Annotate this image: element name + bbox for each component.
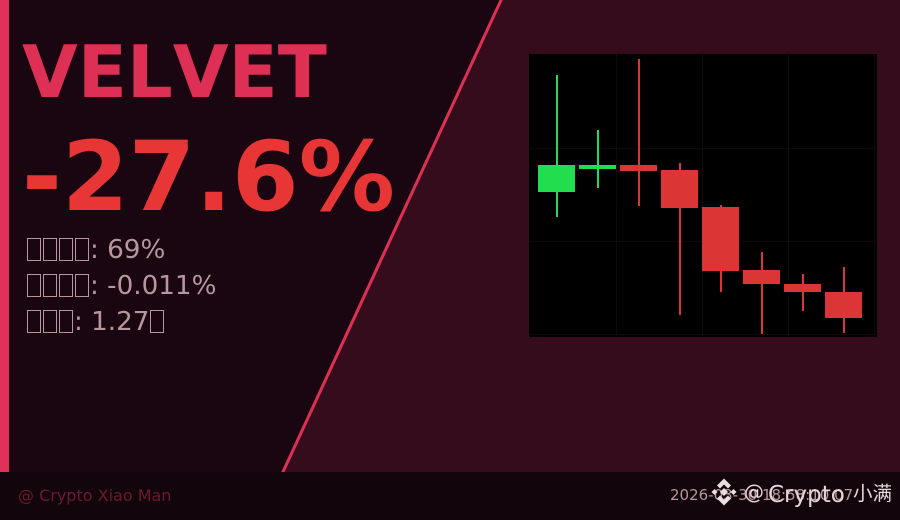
candle 4	[661, 163, 698, 315]
candlestick chart	[529, 54, 877, 337]
candle 6	[743, 252, 780, 334]
footer handle: @ Crypto Xiao Man	[18, 486, 171, 505]
icon: watermark logo	[712, 478, 736, 506]
candle 5	[702, 205, 739, 292]
stats text block: : 1.27	[74, 307, 149, 337]
headline percentage change: -27.6%	[22, 121, 395, 233]
candle 8	[825, 267, 862, 333]
stats text block: : 69%	[90, 235, 165, 265]
title: ticker: VELVET	[22, 30, 327, 114]
watermark text: 小满	[853, 482, 892, 505]
stats text block: : -0.011%	[90, 271, 216, 301]
candle 2	[579, 130, 616, 188]
watermark text: Crypto	[768, 482, 845, 508]
candle 7	[784, 274, 821, 311]
candle 1	[538, 75, 575, 217]
watermark text	[744, 480, 892, 508]
stats text block	[27, 235, 216, 337]
watermark text: @	[744, 480, 764, 504]
footer date: 2026-03-30 18:58:10 07	[670, 486, 853, 504]
candle 3	[620, 59, 657, 206]
